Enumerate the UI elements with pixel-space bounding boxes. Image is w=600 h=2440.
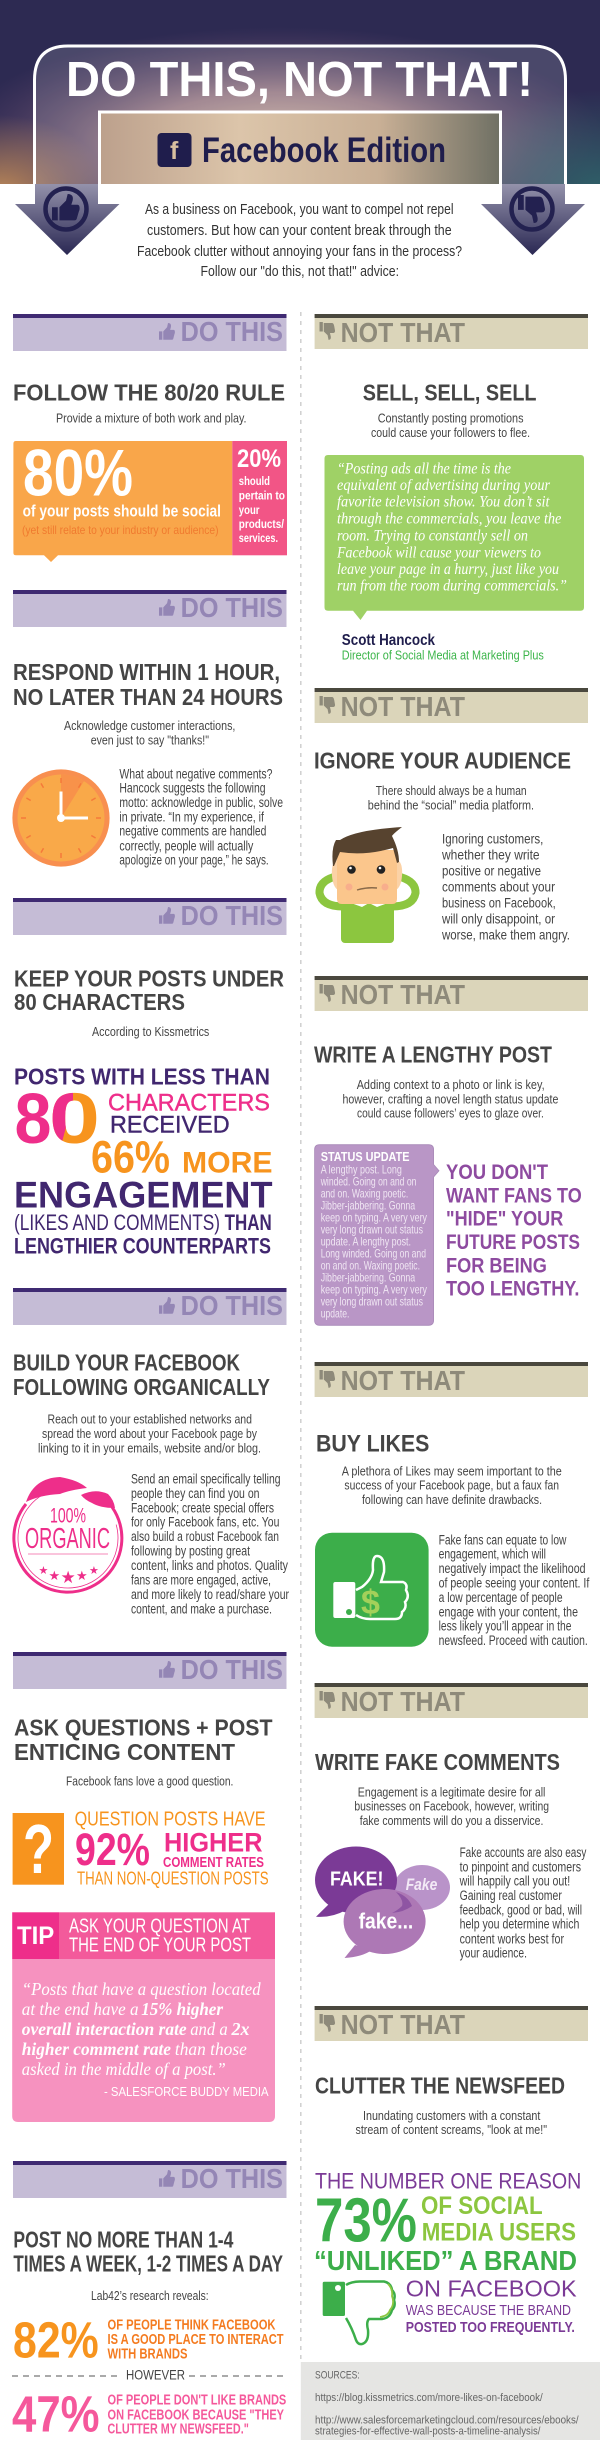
heading — [13, 2227, 283, 2277]
icon: thumbs up with dollar: $ — [361, 1584, 380, 1622]
subheading: Engagement is a legitimate desire for all — [358, 1784, 545, 1799]
statistic: 66 percent more engagement: THAN — [225, 1210, 272, 1235]
status update bubble: winded. Going on and on — [320, 1174, 416, 1188]
callout: 20 percent: should — [239, 474, 270, 488]
text block: engagement, which will — [439, 1547, 546, 1562]
icon: man covering ears — [319, 827, 416, 943]
panel: keep your posts under 80 characters — [14, 965, 284, 1258]
statistic: 47 percent: ON FACEBOOK BECAUSE "THEY — [108, 2407, 284, 2423]
tip panel: ASK YOUR QUESTION AT — [69, 1916, 250, 1938]
quote: higher comment rate — [22, 2039, 171, 2059]
callout: 20 percent — [232, 441, 287, 555]
callout: 80 percent — [13, 436, 232, 562]
heading: ASK QUESTIONS + POST — [14, 1715, 272, 1741]
statistic: 73 percent: 73% — [315, 2187, 417, 2256]
text block: correctly, people will actually — [119, 838, 253, 853]
status update bubble: Jibber-jabbering. Gonna — [321, 1198, 415, 1212]
panel: follow the 80/20 rule — [13, 380, 287, 562]
heading: WRITE A LENGTHY POST — [314, 1042, 552, 1068]
statistic: 73 percent: WAS BECAUSE THE BRAND — [406, 2302, 571, 2319]
subheading: could cause your followers to flee. — [371, 425, 530, 440]
panel: sources: SOURCES: — [315, 2370, 360, 2382]
icon: 100% organic badge: ★ — [38, 1565, 48, 1577]
text block: a low percentage of people — [439, 1590, 563, 1605]
statistic: 92 percent higher: THAN NON-QUESTION POSTS — [77, 1868, 269, 1888]
intro text — [137, 201, 462, 280]
not that banner 5: NOT THAT — [341, 1686, 465, 1717]
status update bubble: Jibber-jabbering. Gonna — [321, 1270, 415, 1284]
subheading: There should always be a human — [376, 783, 527, 798]
do this banner 1 — [13, 314, 286, 351]
do this banner 6 — [13, 2161, 286, 2198]
callout text: FOR BEING — [446, 1254, 547, 1277]
status update bubble: very long drawn out status — [321, 1294, 423, 1308]
icon: speech bubbles: FAKE! — [330, 1869, 384, 1891]
panel: sources — [301, 2362, 600, 2440]
callout: 20 percent: 20% — [237, 445, 281, 473]
text block: motto: acknowledge in public, solve — [119, 795, 283, 810]
subheading: Reach out to your established networks and — [48, 1411, 252, 1426]
quote bubble: Facebook will cause your viewers to — [336, 544, 541, 561]
do this banner 2 — [13, 590, 286, 627]
subheading: Provide a mixture of both work and play. — [56, 411, 246, 426]
quote bubble: room. Trying to constantly sell on — [337, 528, 528, 545]
not that banner 2 — [315, 688, 588, 723]
panel: respond within 1 hour — [12, 659, 283, 868]
panel: post frequency — [12, 2227, 287, 2440]
icon: 100% organic badge: ★ — [76, 1568, 88, 1583]
not that banner 1: NOT THAT — [341, 317, 465, 348]
panel: ask questions + post enticing content — [12, 1715, 275, 2122]
text block: Ignoring customers, — [442, 831, 543, 847]
icon: 100% organic badge: ★ — [60, 1568, 76, 1587]
quote — [22, 1979, 262, 2079]
statistic: 66 percent more engagement: 66% — [91, 1132, 170, 1183]
text block: fans are more engaged, active, — [131, 1572, 271, 1587]
statistic: 66 percent more engagement: POSTS WITH LESS THAN — [14, 1064, 270, 1090]
intro text: Facebook clutter without annoying your fans in the process? — [137, 243, 462, 260]
status update bubble: keep on typing. A very very — [321, 1210, 427, 1224]
text block: and more likely to read/share your — [131, 1587, 289, 1602]
subheading: stream of content screams, "look at me!" — [356, 2122, 547, 2137]
statistic: 73 percent — [314, 2169, 581, 2344]
subheading: Lab42’s research reveals: — [91, 2288, 209, 2303]
do this banner 3: DO THIS — [181, 900, 283, 931]
heading: KEEP YOUR POSTS UNDER — [14, 965, 284, 991]
subheading: businesses on Facebook, however, writing — [354, 1799, 549, 1814]
text block: for only Facebook fans, etc. You — [131, 1515, 279, 1530]
statistic: 66 percent more engagement — [14, 1064, 273, 1258]
not that banner 6 — [315, 2006, 588, 2041]
text block: content, and make a purchase. — [131, 1601, 272, 1616]
statistic: 73 percent: “UNLIKED” — [314, 2245, 454, 2276]
quote bubble: leave your page in a hurry, just like you — [337, 561, 559, 578]
statistic: 82 percent: 82% — [13, 2312, 99, 2369]
text block: comments about your — [442, 879, 555, 895]
icon: speech bubbles: fake... — [359, 1909, 413, 1934]
do this banner 2: DO THIS — [181, 592, 283, 623]
not that banner 3: NOT THAT — [341, 979, 465, 1010]
heading: SELL, SELL, SELL — [363, 380, 536, 406]
attribution: Director of Social Media at Marketing Plus — [342, 648, 544, 662]
subheading — [342, 1077, 558, 1121]
heading — [13, 659, 283, 710]
text block: whether they write — [441, 847, 540, 863]
text block: Gaining real customer — [460, 1888, 562, 1903]
subheading: Inundating customers with a constant — [363, 2108, 541, 2123]
quote bubble: “Posting ads all the time is the — [337, 460, 511, 477]
tip panel — [12, 1912, 275, 2122]
status update bubble: Long winded. Going on and — [321, 1246, 426, 1260]
status update bubble: update. A lengthy post. — [321, 1234, 411, 1248]
callout text: WANT FANS TO — [446, 1184, 582, 1207]
heading — [14, 965, 284, 1015]
statistic: 47 percent: CLUTTER MY NEWSFEED." — [108, 2422, 249, 2438]
statistic: 82 percent: WITH BRANDS — [108, 2346, 188, 2362]
text block: What about negative comments? — [119, 766, 273, 781]
subtitle: Facebook Edition: Facebook Edition — [202, 131, 446, 170]
subheading — [356, 2108, 547, 2137]
do this banner 4 — [13, 1288, 286, 1325]
text block — [441, 831, 570, 943]
text block — [459, 1845, 586, 1961]
quote bubble: equivalent of advertising during your — [337, 477, 551, 494]
panel: write a lengthy post — [314, 1042, 582, 1325]
text block: Facebook; create special offers — [131, 1500, 274, 1515]
status update bubble: very long drawn out status — [321, 1222, 423, 1236]
statistic: 82 percent: IS A GOOD PLACE TO INTERACT — [108, 2332, 284, 2348]
statistic: 66 percent more engagement: 0 — [49, 1080, 100, 1159]
icon: 100% organic badge: ★ — [48, 1568, 60, 1583]
statistic: 66 percent more engagement: 8 — [14, 1080, 52, 1159]
do this banner 4: DO THIS — [181, 1290, 283, 1321]
panel: sources: https://blog.kissmetrics.com/more-likes-on-facebook/ — [315, 2392, 544, 2404]
icon: speech bubbles: Fake — [406, 1875, 437, 1894]
statistic: 66 percent more engagement: CHARACTERS — [108, 1090, 270, 1117]
statistic: 92 percent higher: QUESTION POSTS HAVE — [75, 1809, 266, 1831]
panel: write fake comments — [315, 1749, 586, 1961]
heading — [14, 1715, 272, 1765]
icon: thumbs down — [323, 2281, 395, 2344]
subheading — [371, 411, 530, 440]
text block: content works best for — [460, 1931, 564, 1946]
text block — [119, 766, 283, 868]
heading: FOLLOW THE 80/20 RULE — [13, 380, 285, 406]
icon: speech bubbles — [315, 1846, 450, 1958]
heading: TIMES A WEEK, 1-2 TIMES A DAY — [13, 2251, 283, 2277]
statistic: 73 percent: A BRAND — [459, 2245, 577, 2276]
heading — [13, 1350, 270, 1400]
statistic: 73 percent: MEDIA USERS — [422, 2219, 576, 2247]
not that banner 5 — [315, 1683, 588, 1718]
statistic: 73 percent: ON FACEBOOK — [406, 2276, 577, 2302]
subheading: could cause followers’ eyes to glaze over. — [357, 1106, 544, 1121]
text block: in private. “In my experience, if — [119, 809, 264, 824]
icon: 100% organic badge: ★ — [89, 1565, 99, 1577]
do this banner 5: DO THIS — [181, 1654, 283, 1685]
quote: and a — [190, 2019, 228, 2039]
quote: than those — [175, 2039, 247, 2059]
heading: POST NO MORE THAN 1-4 — [13, 2227, 234, 2253]
tip panel: - SALESFORCE BUDDY MEDIA — [104, 2084, 269, 2099]
tip panel: TIP — [17, 1922, 54, 1950]
quote bubble — [324, 455, 584, 620]
statistic: 92 percent higher: 92% — [75, 1824, 150, 1875]
text block: positive or negative — [442, 863, 541, 879]
subheading: A plethora of Likes may seem important to the — [342, 1463, 562, 1478]
header background — [0, 0, 600, 184]
subheading: behind the “social” media platform. — [368, 797, 534, 812]
heading: BUY LIKES — [316, 1430, 429, 1457]
statistic: 66 percent more engagement: (LIKES AND COMMENTS) — [14, 1210, 220, 1235]
intro text: Follow our "do this, not that!" advice: — [200, 263, 399, 280]
attribution: Scott Hancock — [342, 632, 435, 649]
statistic: 47 percent — [12, 2386, 287, 2440]
callout: 20 percent: pertain to — [239, 488, 285, 502]
not that banner 2: NOT THAT — [341, 691, 465, 722]
quote bubble: run from the room during commercials.” — [337, 578, 567, 595]
quote bubble: through the commercials, you leave the — [337, 511, 561, 528]
text block: business on Facebook, — [442, 895, 556, 911]
statistic: 47 percent: OF PEOPLE DON'T LIKE BRANDS — [108, 2393, 287, 2409]
quote: “Posts that have a question located — [22, 1979, 262, 1999]
title: DO THIS, NOT THAT! — [66, 53, 533, 107]
callout text: TOO LENGTHY. — [446, 1278, 579, 1301]
icon: 100% organic badge: 100% — [50, 1505, 86, 1528]
heading: NO LATER THAN 24 HOURS — [13, 684, 283, 710]
callout: 20 percent: products/ — [239, 517, 285, 531]
subheading: Facebook fans love a good question. — [66, 1774, 233, 1789]
text block: following by posting great — [131, 1544, 250, 1559]
text block: also build a robust Facebook fan — [131, 1529, 279, 1544]
subheading: even just to say "thanks!" — [91, 732, 209, 747]
text block: will only disappoint, or — [441, 911, 555, 927]
tip panel: THE END OF YOUR POST — [69, 1934, 251, 1956]
divider: however: HOWEVER — [126, 2367, 185, 2383]
text block: Send an email specifically telling — [131, 1472, 280, 1487]
statistic: 82 percent — [13, 2312, 284, 2369]
text block: your audience. — [460, 1946, 527, 1961]
icon: facebook: f — [170, 137, 179, 165]
subheading: spread the word about your Facebook page by — [42, 1426, 257, 1441]
quote bubble: favorite television show. You don’t sit — [337, 494, 550, 511]
panel: buy likes — [315, 1430, 589, 1648]
status update bubble: on and on. Waxing poetic. — [321, 1258, 420, 1272]
subheading: linking to it in your emails, website and/or blog. — [38, 1440, 261, 1455]
quote: at the end have a — [22, 1999, 138, 2019]
statistic: 66 percent more engagement: LENGTHIER COUNTERPARTS — [14, 1233, 271, 1258]
heading: ENTICING CONTENT — [14, 1739, 235, 1765]
status update bubble: and on. Waxing poetic. — [321, 1186, 408, 1200]
not that banner 6: NOT THAT — [341, 2009, 465, 2040]
statistic: 66 percent more engagement: 0 — [49, 1080, 100, 1159]
panel: ignore your audience — [314, 747, 571, 943]
panel: sell, sell, sell — [324, 380, 584, 662]
text block: Hancock suggests the following — [119, 781, 266, 796]
do this banner 1: DO THIS — [181, 316, 283, 347]
subheading: Constantly posting promotions — [378, 411, 524, 426]
quote: 15% higher — [141, 1999, 224, 2019]
icon: clock — [12, 769, 110, 867]
callout text — [446, 1161, 582, 1301]
callout: 20 percent: your — [239, 503, 260, 517]
do this banner 5 — [13, 1652, 286, 1689]
statistic: 66 percent more engagement: MORE — [182, 1147, 272, 1180]
intro text: As a business on Facebook, you want to compel not repel — [145, 201, 454, 218]
text block: will happily call you out! — [459, 1874, 570, 1889]
text block: apologize on your page,” he says. — [119, 853, 269, 868]
heading: WRITE FAKE COMMENTS — [315, 1749, 560, 1775]
statistic: 92 percent higher: ? — [23, 1810, 54, 1888]
do this banner 6: DO THIS — [181, 2163, 283, 2194]
not that banner 3 — [315, 976, 588, 1011]
icon: thumbs up with dollar — [315, 1533, 429, 1647]
subheading: Acknowledge customer interactions, — [64, 718, 235, 733]
subheading — [368, 783, 534, 812]
text block: negative comments are handled — [119, 824, 266, 839]
subheading — [354, 1784, 549, 1828]
not that banner 1 — [315, 314, 588, 349]
text block: content, links and photos. Quality — [131, 1558, 288, 1573]
heading: FOLLOWING ORGANICALLY — [13, 1374, 270, 1400]
status update bubble: STATUS UPDATE — [321, 1149, 410, 1164]
text block — [439, 1532, 589, 1648]
icon: 100% organic badge: ORGANIC — [25, 1523, 110, 1555]
panel: build your facebook following organically — [0, 1350, 289, 1616]
icon: 100% organic badge — [0, 1468, 138, 1608]
arrow: do this — [15, 184, 120, 255]
callout text: YOU DON'T — [446, 1161, 548, 1184]
panel: clutter the newsfeed — [314, 2072, 581, 2344]
intro text: customers. But how can your content break through the — [147, 222, 452, 239]
status update bubble: A lengthy post. Long — [321, 1162, 402, 1176]
heading: RESPOND WITHIN 1 HOUR, — [13, 659, 280, 685]
statistic: 66 percent more engagement: RECEIVED — [110, 1112, 230, 1139]
attribution — [342, 632, 544, 662]
callout: 80 percent: 80% — [23, 436, 133, 510]
statistic: 82 percent: OF PEOPLE THINK FACEBOOK — [108, 2317, 276, 2333]
heading: 80 CHARACTERS — [14, 989, 185, 1015]
text block: people they can find you on — [131, 1486, 260, 1501]
subheading: Adding context to a photo or link is key, — [357, 1077, 545, 1092]
statistic: 92 percent higher: COMMENT RATES — [163, 1854, 264, 1871]
callout: 80 percent: of your posts should be social — [23, 502, 221, 521]
statistic: 73 percent: OF SOCIAL — [421, 2192, 543, 2220]
quote: overall interaction rate — [22, 2019, 187, 2039]
subheading: fake comments will do you a disservice. — [360, 1813, 543, 1828]
callout text: "HIDE" YOUR — [446, 1208, 563, 1231]
statistic: 92 percent higher — [13, 1809, 269, 1888]
arrow: not that — [481, 184, 585, 255]
subheading — [38, 1411, 261, 1455]
subheading — [342, 1463, 562, 1507]
do this banner 3 — [13, 898, 286, 935]
status update bubble: update. — [321, 1306, 349, 1320]
heading: IGNORE YOUR AUDIENCE — [314, 747, 571, 773]
subheading — [64, 718, 235, 747]
callout: 80 percent: (yet still relate to your industry or audience) — [22, 523, 219, 537]
subheading: however, crafting a novel length status update — [342, 1091, 558, 1106]
not that banner 4: NOT THAT — [341, 1365, 465, 1396]
statistic: 66 percent more engagement: ENGAGEMENT — [14, 1174, 273, 1215]
text block — [131, 1472, 289, 1616]
heading: BUILD YOUR FACEBOOK — [13, 1350, 240, 1376]
subheading: According to Kissmetrics — [92, 1024, 210, 1039]
status update bubble: keep on typing. A very very — [321, 1282, 427, 1296]
header frame with arrows — [15, 46, 585, 255]
statistic: 92 percent higher: HIGHER — [164, 1828, 262, 1858]
not that banner 4 — [315, 1362, 588, 1397]
subheading: following can have definite drawbacks. — [362, 1492, 542, 1507]
callout: 20 percent: services. — [239, 531, 278, 545]
status update bubble — [315, 1145, 439, 1325]
quote: 2x — [230, 2019, 250, 2039]
quote: asked in the middle of a post.” — [22, 2059, 226, 2079]
text block: worse, make them angry. — [441, 927, 570, 943]
icon: facebook — [158, 133, 192, 167]
panel: sources: strategies-for-effective-wall-posts-a-timeline-analysis/ — [315, 2426, 541, 2438]
